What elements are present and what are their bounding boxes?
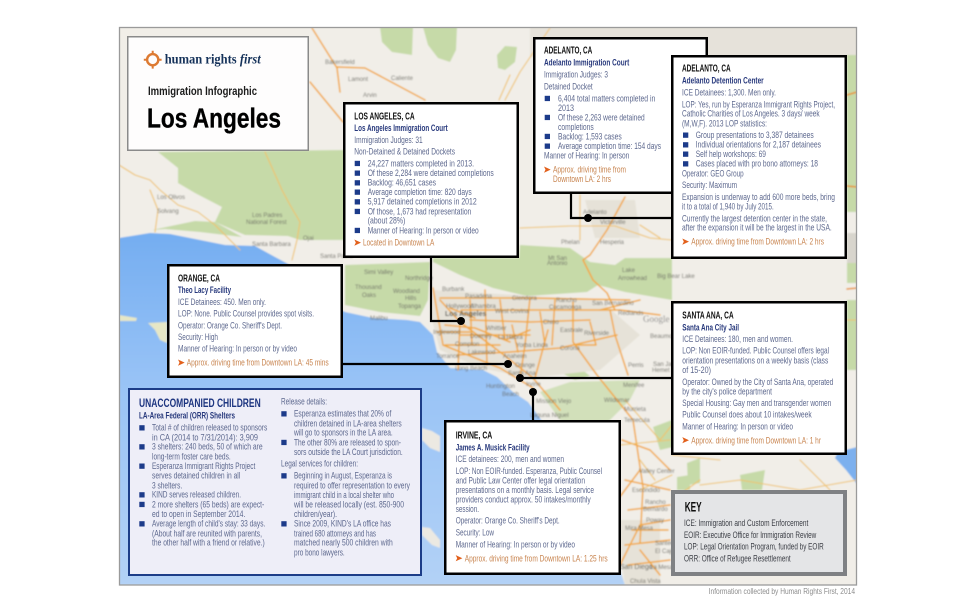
- panel: Adelanto Immigration Court: Manner of Hearing: In person: [544, 151, 629, 161]
- panel: Unaccompanied children: will go to sponsors in the LA area.: [293, 428, 393, 438]
- subtitle: Immigration Infographic: [148, 84, 257, 98]
- panel: Adelanto Detention Center: Approx. driving time from Downtown LA: 2 hrs: [691, 237, 824, 247]
- panel: Adelanto Detention Center: Security: Maximum: [682, 180, 737, 190]
- panel: Los Angeles Immigration Court: 24,227 matters completed in 2013.: [368, 158, 474, 168]
- main title: Los Angeles: [147, 103, 281, 134]
- panel: Unaccompanied children: 2 more shelters (65 beds) are expect-: [152, 499, 264, 509]
- panel: Adelanto Immigration Court: [534, 38, 707, 193]
- connector: Orange: [343, 363, 508, 365]
- panel: James A. Musick Facility, Irvine: LOP: Non EOIR-funded. Esperanza, Public Counsel: [456, 466, 602, 476]
- map place labels: Inglewood: [433, 330, 460, 336]
- islands: [119, 315, 440, 548]
- connector: Adelanto: [571, 194, 671, 218]
- lake: Salton Sea: [835, 447, 857, 484]
- panel: Adelanto Immigration Court: Of these 2,263 were detained: [558, 112, 645, 122]
- map place labels: Mt San: [548, 256, 567, 262]
- map place labels: Beaumont: [650, 334, 678, 340]
- panel: James A. Musick Facility, Irvine: session.: [456, 504, 479, 514]
- map place labels: Arrowhead: [618, 276, 647, 282]
- map place labels: Corona: [560, 346, 580, 352]
- panel: Unaccompanied children: The other 80% are released to spon-: [294, 437, 401, 447]
- panel: Los Angeles Immigration Court: Non-Detained & Detained Dockets: [354, 146, 455, 156]
- panel: James A. Musick Facility, Irvine: providers conduct approx. 50 intakes/monthly: [456, 495, 591, 505]
- map place labels: Torrance: [436, 354, 460, 360]
- map place labels: [157, 60, 695, 585]
- panel: Adelanto Detention Center: LOP: Yes, run by Esperanza Immigrant Rights Project,: [682, 99, 835, 109]
- map place labels: Santa Paula: [320, 254, 353, 260]
- map place labels: Anaheim: [503, 354, 527, 360]
- map place labels: El Cajon: [655, 549, 678, 555]
- panel: Theo Lacy Facility, Orange: Approx. driving time from Downtown LA: 45 mins: [187, 358, 329, 368]
- map place labels: Redlands: [618, 311, 643, 317]
- map place labels: La Habra: [498, 335, 523, 341]
- map place labels: Caliente: [391, 76, 414, 82]
- panel: Santa Ana City Jail: Manner of Hearing: In person or video: [682, 421, 793, 431]
- panel: Santa Ana City Jail: of 15-20): [682, 365, 711, 375]
- map place labels: Rancho: [645, 500, 666, 506]
- panel: Adelanto Detention Center: Operator: GEO Group: [682, 168, 744, 178]
- panel: Theo Lacy Facility, Orange: ICE Detainees: 450. Men only.: [178, 297, 266, 307]
- panel: Unaccompanied children: Since 2009, KIND's LA office has: [294, 519, 391, 529]
- panel: Unaccompanied children: will be released locally (est. 850-900: [293, 499, 404, 509]
- ocean: [119, 233, 625, 585]
- panel: Santa Ana City Jail: orientation presentations on a weekly basis (class: [682, 355, 829, 365]
- map place labels: West Covina: [495, 309, 530, 315]
- map place labels: Santa Barbara: [252, 242, 291, 248]
- panel: Santa Ana City Jail: by the city's police department: [682, 386, 772, 396]
- icon: human rights first logo: [144, 51, 162, 69]
- panel: Adelanto Detention Center: it to a total of 1,940 by July 2015.: [682, 201, 774, 211]
- panel: Theo Lacy Facility, Orange: Security: High: [178, 332, 218, 342]
- panel: Adelanto Detention Center: [672, 56, 846, 258]
- map place labels: Eastvale: [560, 328, 584, 334]
- map place labels: Beach: [502, 392, 519, 398]
- panel: Los Angeles Immigration Court: Immigration Judges: 31: [354, 135, 423, 145]
- panel: Unaccompanied children: Beginning in August, Esperanza is: [294, 471, 392, 481]
- panel: James A. Musick Facility, Irvine: Manner of Hearing: In person or by video: [456, 539, 575, 549]
- panel: Unaccompanied children: Average length of child's stay: 33 days.: [152, 519, 265, 529]
- panel: Adelanto Detention Center: ICE Detainees: 1,300. Men only.: [682, 87, 776, 97]
- panel: Unaccompanied children: ed to open in September 2014.: [152, 509, 245, 519]
- panel: Los Angeles Immigration Court: Backlog: 46,651 cases: [368, 178, 436, 188]
- map place labels: San Jacinto: [653, 362, 685, 368]
- panel: Unaccompanied children: 3 shelters.: [152, 480, 182, 490]
- panel: Adelanto Detention Center: Adelanto Detention Center: [682, 76, 764, 86]
- panel: Unaccompanied children: in CA (2014 to 7/31/2014): 3,909: [152, 432, 258, 442]
- map place labels: Oaks: [362, 293, 376, 299]
- map place labels: Mission Viejo: [536, 399, 572, 405]
- map place labels: Google: [643, 314, 670, 324]
- map place labels: Hesperia: [600, 240, 625, 246]
- panel: Los Angeles Immigration Court: Of those, 1,673 had representation: [368, 206, 471, 216]
- map place labels: Menifee: [623, 383, 645, 389]
- panel: Unaccompanied children: 3 shelters: 240 beds, 50 of which are: [152, 442, 263, 452]
- map place labels: Compton: [455, 342, 479, 348]
- panel: Unaccompanied children: children detained in LA-area shelters: [294, 418, 402, 428]
- map place labels: Riverside: [584, 331, 610, 337]
- panel: Unaccompanied children: (About half are reunited with parents,: [152, 528, 262, 538]
- map place labels: Mira Mesa: [625, 526, 654, 532]
- panel: Adelanto Detention Center: (M,W,F). 2013 LOP statistics:: [682, 118, 767, 128]
- map place labels: San Bernardino: [592, 301, 634, 307]
- map place labels: Thousand: [355, 285, 382, 291]
- panel: James A. Musick Facility, Irvine: and Public Law Center offer legal orientation: [456, 475, 585, 485]
- map place labels: Big Bear Lake: [657, 274, 695, 280]
- map place labels: Laguna Niguel: [530, 413, 569, 419]
- map place labels: National Forest: [246, 220, 287, 226]
- map place labels: La Mesa: [650, 565, 674, 571]
- panel: Adelanto Detention Center: ADELANTO, CA: [682, 64, 731, 75]
- map place labels: Irvine: [526, 382, 541, 388]
- panel: Unaccompanied children: LA-Area Federal (ORR) Shelters: [139, 411, 235, 421]
- panel: Adelanto Immigration Court: Detained Docket: [544, 81, 593, 91]
- map place labels: Escondido: [632, 488, 661, 494]
- map place labels: Chula Vista: [630, 579, 661, 585]
- panel: key: KEY: [685, 499, 702, 515]
- panel: Adelanto Detention Center: Catholic Charities of Los Angeles. 3 days/ week: [682, 109, 820, 119]
- map place labels: Burbank: [442, 287, 465, 293]
- panel: Unaccompanied children: children/year).: [294, 509, 337, 519]
- map place labels: Hollywood: [446, 304, 474, 310]
- panel: Adelanto Immigration Court: Average completion time: 154 days: [558, 141, 661, 151]
- panel: Adelanto Detention Center: Currently the largest detention center in the state,: [682, 213, 827, 223]
- map place labels: Ojai: [303, 236, 314, 242]
- map place labels: Rancho: [556, 298, 577, 304]
- panel: Adelanto Immigration Court: ADELANTO, CA: [544, 46, 592, 57]
- map place labels: Temecula: [624, 418, 650, 424]
- panel: Los Angeles Immigration Court: Average completion time: 820 days: [368, 187, 472, 197]
- panel: Santa Ana City Jail: Approx. driving time from Downtown LA: 1 hr: [691, 435, 821, 445]
- panel: Theo Lacy Facility, Orange: Operator: Orange Co. Sheriff's Dept.: [178, 320, 282, 330]
- panel: key: [673, 492, 845, 574]
- map place labels: Poway: [646, 518, 664, 524]
- panel: title: [128, 37, 308, 150]
- panel: key: ICE: Immigration and Custom Enforcement: [684, 518, 809, 528]
- map frame: [120, 28, 856, 585]
- map place labels: Bakersfield: [325, 60, 355, 66]
- map place labels: Alhambra: [470, 304, 496, 310]
- panel: Santa Ana City Jail: [672, 302, 846, 454]
- map place labels: Lamont: [348, 77, 368, 83]
- panel: Unaccompanied children: Esperanza Immigrant Rights Project: [152, 461, 256, 471]
- map place labels: Chino: [543, 320, 559, 326]
- map place labels: Simi Valley: [364, 270, 393, 276]
- panel: Unaccompanied children: sors outside the LA Court jurisdiction.: [294, 447, 403, 457]
- panel: Santa Ana City Jail: SANTA ANA, CA: [682, 310, 734, 321]
- map place labels: Murrieta: [624, 407, 647, 413]
- connector: Santa Ana: [520, 377, 671, 379]
- panel: Los Angeles Immigration Court: LOS ANGELES, CA: [354, 111, 415, 122]
- panel: Los Angeles Immigration Court: Of these 2,284 were detained completions: [368, 168, 494, 178]
- panel: James A. Musick Facility, Irvine: presentations on a monthly basis. Legal service: [456, 485, 594, 495]
- panel: Theo Lacy Facility, Orange: [168, 265, 342, 377]
- map place labels: Los Olivos: [157, 195, 185, 201]
- panel: Adelanto Detention Center: Expansion is underway to add 600 more beds, bring: [682, 192, 835, 202]
- panel: Unaccompanied children: Total # of children released to sponsors: [152, 423, 268, 433]
- panel: Unaccompanied children: KIND serves released children.: [152, 490, 241, 500]
- highways: [310, 28, 670, 575]
- map place labels: Los Padres: [252, 213, 282, 219]
- panel: Unaccompanied children: Legal services for children:: [281, 459, 358, 469]
- panel: Unaccompanied children: pro bono lawyers.: [294, 547, 345, 557]
- connector: Los Angeles court: [431, 258, 461, 321]
- panel: Unaccompanied children: trained 680 attorneys and has: [294, 528, 376, 538]
- panel: Los Angeles Immigration Court: Los Angeles Immigration Court: [354, 123, 448, 133]
- panel: Unaccompanied children: serves detained children in all: [152, 471, 240, 481]
- panel: key: LOP: Legal Orientation Program, funded by EOIR: [684, 542, 824, 552]
- map place labels: Solvang: [157, 209, 179, 215]
- panel: Unaccompanied children: the other half with a friend or relative.): [152, 538, 265, 548]
- panel: Adelanto Detention Center: Cases placed with pro bono attorneys: 18: [696, 159, 818, 169]
- map place labels: Wildomar: [604, 398, 629, 404]
- map place labels: Arvin: [363, 93, 377, 99]
- panel: Adelanto Immigration Court: Immigration Judges: 3: [544, 70, 608, 80]
- connector: Irvine: [532, 392, 534, 420]
- map place labels: Long Beach: [455, 366, 487, 372]
- panel: James A. Musick Facility, Irvine: [445, 421, 620, 574]
- panel: Los Angeles Immigration Court: (about 28%): [368, 216, 405, 226]
- map place labels: Hills: [405, 296, 416, 302]
- map place labels: Victorville: [600, 220, 626, 226]
- map place labels: Glendora: [512, 296, 537, 302]
- logo wordmark: human rights first: [165, 52, 262, 67]
- heading: unaccompanied children: UNACCOMPANIED CHILDREN: [139, 396, 261, 410]
- panel: James A. Musick Facility, Irvine: IRVINE, CA: [456, 430, 492, 441]
- panel: Adelanto Immigration Court: Adelanto Immigration Court: [544, 58, 629, 68]
- panel: Unaccompanied children: Release details:: [281, 397, 327, 407]
- panel: Unaccompanied children: required to offer representation to every: [294, 480, 410, 490]
- panel: Unaccompanied children: long-term foster care beds.: [152, 451, 231, 461]
- map place labels: Bernardo: [643, 507, 668, 513]
- panel: Santa Ana City Jail: ICE Detainees: 180, men and women.: [682, 334, 793, 344]
- panel: James A. Musick Facility, Irvine: James A. Musick Facility: [456, 442, 530, 452]
- map place labels: Woodland: [393, 289, 420, 295]
- panel: Adelanto Detention Center: Self help workshops: 69: [696, 149, 766, 159]
- map place labels: Whittier: [486, 326, 506, 332]
- map place labels: Downey: [470, 334, 492, 340]
- panel: James A. Musick Facility, Irvine: ICE detainees: 200, men and women: [456, 454, 564, 464]
- map place labels: Huntington: [486, 384, 515, 390]
- panel: Los Angeles Immigration Court: Located in Downtown LA: [363, 237, 434, 247]
- panel: Adelanto Immigration Court: 2013: [558, 103, 574, 113]
- panel: Unaccompanied children: Esperanza estimates that 20% of: [294, 409, 392, 419]
- panel: Los Angeles Immigration Court: [344, 103, 518, 257]
- panel: Adelanto Immigration Court: completions: [558, 122, 594, 132]
- map place labels: Hemet: [652, 368, 670, 374]
- map place labels: Perris: [628, 363, 644, 369]
- panel: Santa Ana City Jail: Santa Ana City Jail: [682, 322, 739, 332]
- map place labels: Northridge: [405, 276, 434, 282]
- map place labels: Yorba Linda: [516, 343, 548, 349]
- panel: Los Angeles Immigration Court: Manner of Hearing: In person or video: [368, 225, 479, 235]
- map place labels: Orange: [515, 363, 536, 369]
- panel: Unaccompanied children: matched nearly 500 children with: [294, 538, 393, 548]
- map place labels: Santee: [655, 541, 675, 547]
- map place labels: Lake: [622, 268, 636, 274]
- location markers: [457, 214, 592, 396]
- panel: Adelanto Immigration Court: Backlog: 1,593 cases: [558, 131, 622, 141]
- map place labels: Antonio: [547, 261, 568, 267]
- map place labels: San Diego: [620, 564, 653, 571]
- map place labels: Lakewood: [468, 350, 495, 356]
- panel: Santa Ana City Jail: Special Housing: Gay men and transgender women: [682, 398, 831, 408]
- map place labels: Santa Ana: [508, 371, 536, 377]
- panel: Theo Lacy Facility, Orange: LOP: None. Public Counsel provides spot visits.: [178, 309, 314, 319]
- panel: Adelanto Detention Center: after the expansion it will be the largest in the USA.: [682, 223, 832, 233]
- urban areas: [432, 200, 660, 585]
- map place labels: Pasadena: [465, 294, 493, 300]
- green terrain: [152, 27, 857, 490]
- panel: James A. Musick Facility, Irvine: Approx. driving time from Downtown LA: 1.25 hrs: [465, 553, 608, 563]
- panel: Theo Lacy Facility, Orange: Theo Lacy Facility: [178, 285, 231, 295]
- map place labels: Phelan: [561, 240, 580, 246]
- panel: Los Angeles Immigration Court: 5,917 detained completions in 2012: [368, 197, 477, 207]
- panel: Adelanto Immigration Court: Approx. driving time from: [553, 165, 626, 175]
- panel: Theo Lacy Facility, Orange: ORANGE, CA: [178, 273, 220, 284]
- panel: Adelanto Detention Center: Individual orientations for 2,187 detainees: [696, 140, 821, 150]
- map place labels: Adelanto: [583, 210, 607, 216]
- panel: key: EOIR: Executive Office for Immigration Review: [684, 530, 817, 540]
- panel: Santa Ana City Jail: LOP: Non EOIR-funded. Public Counsel offers legal: [682, 346, 829, 356]
- map place labels: Topanga: [398, 304, 422, 310]
- panel: Santa Ana City Jail: Public Counsel does about 10 intakes/week: [682, 410, 812, 420]
- panel: James A. Musick Facility, Irvine: Operator: Orange Co. Sheriff's Dept.: [456, 516, 560, 526]
- map place labels: Los Angeles: [445, 311, 486, 318]
- footer credit: Information collected by Human Rights First, 2014: [709, 586, 855, 596]
- map place labels: Malibu: [370, 316, 388, 322]
- panel: Unaccompanied children: [129, 389, 421, 575]
- map place labels: Cucamonga: [549, 305, 582, 311]
- panel: James A. Musick Facility, Irvine: Security: Low: [456, 528, 494, 538]
- map place labels: Valley Center: [639, 469, 675, 475]
- panel: key: ORR: Office of Refugee Resettlement: [684, 553, 791, 563]
- panel: Santa Ana City Jail: Operator: Owned by the City of Santa Ana, operated: [682, 377, 833, 387]
- map background: [119, 27, 857, 585]
- panel: Adelanto Immigration Court: Downtown LA: 2 hrs: [553, 174, 611, 184]
- panel: Adelanto Immigration Court: 6,404 total matters completed in: [558, 93, 655, 103]
- panel: Theo Lacy Facility, Orange: Manner of Hearing: In person or by video: [178, 344, 297, 354]
- panel: Adelanto Detention Center: Group presentations to 3,387 detainees: [696, 130, 814, 140]
- panel: Unaccompanied children: immigrant child in a local shelter who: [294, 490, 394, 500]
